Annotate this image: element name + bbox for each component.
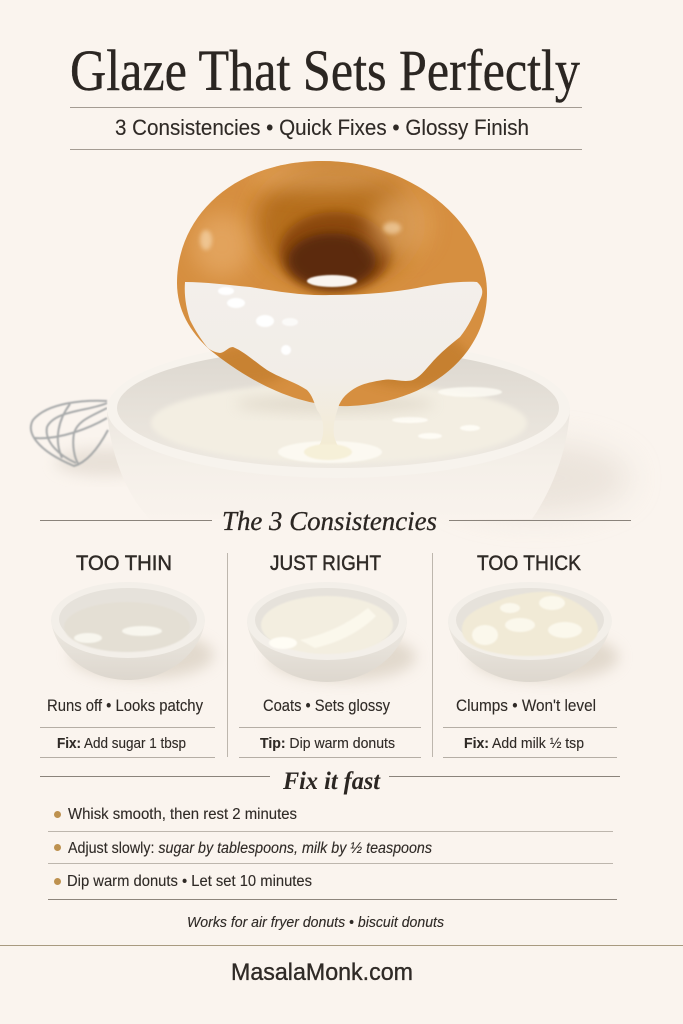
tip 1: Whisk smooth, then rest 2 minutes — [68, 806, 297, 823]
hero illustration: donut dipped in glaze bowl — [31, 161, 630, 519]
donut — [177, 161, 487, 406]
heading: TOO THIN — [76, 552, 172, 575]
donut shadow in bowl — [235, 395, 435, 413]
section heading: Fix it fast: Fix it fast — [282, 768, 381, 795]
bowl shadow — [440, 442, 630, 514]
large bowl body — [107, 408, 570, 519]
description: Coats • Sets glossy — [263, 696, 390, 715]
glaze drip splash — [304, 444, 352, 460]
fix: Fix: Add sugar 1 tbsp — [57, 735, 186, 752]
donut shading and hole — [192, 165, 470, 388]
fix: Fix: Add milk ½ tsp — [464, 735, 584, 752]
panel: too thick — [443, 552, 619, 758]
icon: whisk — [31, 401, 108, 466]
note: Works for air fryer donuts • biscuit donuts — [187, 914, 444, 931]
tip 2: Adjust slowly: sugar by tablespoons, milk by ½ teaspoons — [68, 840, 432, 857]
icon: thin glaze bowl — [51, 582, 214, 680]
icon: just right glaze bowl — [247, 582, 416, 682]
glaze coat and drip — [185, 282, 482, 456]
heading: TOO THICK — [477, 552, 581, 575]
tips list — [48, 806, 617, 900]
icon: thick glaze bowl — [448, 582, 619, 682]
subtitle band: 3 Consistencies • Quick Fixes • Glossy Finish — [115, 115, 529, 140]
description: Clumps • Won't level — [456, 696, 596, 715]
title: Glaze That Sets Perfectly — [70, 38, 580, 103]
panel: too thin — [40, 552, 215, 758]
section heading: The 3 Consistencies: The 3 Consistencies — [222, 506, 437, 536]
footer: MasalaMonk.com — [231, 959, 413, 986]
column dividers — [228, 553, 432, 757]
glaze pool — [151, 383, 527, 463]
heading: JUST RIGHT — [270, 552, 381, 575]
glaze highlights — [218, 287, 298, 355]
large bowl rim — [107, 340, 570, 478]
panel: just right — [239, 552, 421, 758]
tip: Tip: Dip warm donuts — [260, 735, 395, 752]
tip 3: Dip warm donuts • Let set 10 minutes — [67, 873, 312, 890]
description: Runs off • Looks patchy — [47, 696, 203, 715]
